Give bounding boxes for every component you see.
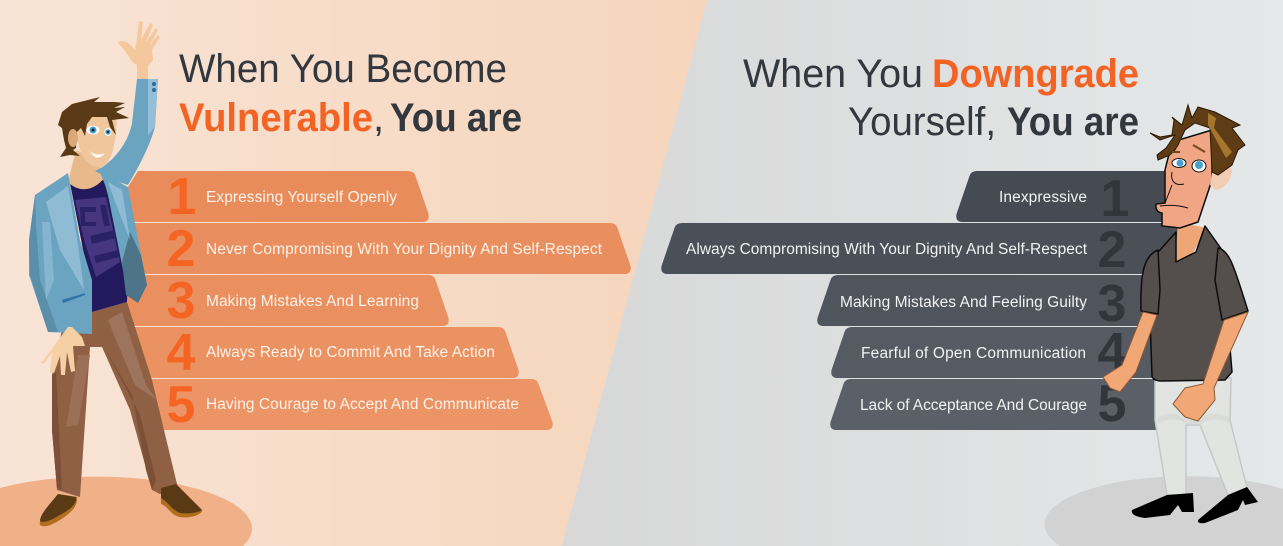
bar 1: 1 — [1101, 170, 1129, 228]
bar 4: Always Ready to Commit And Take Action — [206, 344, 495, 361]
heading: vulnerable: You are — [390, 96, 522, 140]
hand on hip — [41, 327, 85, 375]
bar 4 — [135, 324, 519, 382]
trousers — [52, 302, 178, 497]
trousers — [1155, 378, 1247, 495]
bar 5 — [150, 376, 553, 434]
panel: left background — [0, 0, 707, 546]
heading: downgrade: You are — [1007, 100, 1139, 144]
bar 5: Having Courage to Accept And Communicate — [206, 396, 519, 413]
neck — [1175, 222, 1206, 262]
arms and fists — [1103, 312, 1248, 421]
bar 2: 2 — [1098, 221, 1126, 279]
bar 1: Inexpressive — [999, 189, 1087, 206]
bar 2: 2 — [167, 220, 195, 278]
bar 1: Expressing Yourself Openly — [206, 189, 397, 206]
icon: right black shoe — [1198, 487, 1258, 523]
heading: vulnerable — [179, 47, 522, 140]
bar 3: Making Mistakes And Learning — [206, 293, 419, 310]
ground ellipse: right — [1045, 476, 1283, 546]
jacket — [29, 172, 147, 334]
figure: confident man — [29, 21, 202, 526]
heading: vulnerable: When You Become — [179, 47, 507, 91]
bar 5: 5 — [1098, 375, 1126, 433]
bar 5 — [830, 375, 1160, 433]
ground ellipse: left — [0, 477, 252, 546]
heading: vulnerable: , — [373, 96, 384, 140]
bar 2 — [128, 220, 631, 278]
heading: downgrade: Downgrade — [932, 52, 1139, 96]
bar 2 — [661, 221, 1180, 279]
bar 1: 1 — [168, 168, 196, 226]
bar 4 — [831, 323, 1160, 381]
shirt — [70, 180, 128, 312]
bar 2: Never Compromising With Your Dignity And Self-Respect — [206, 241, 603, 258]
bar 4: 4 — [1098, 323, 1127, 381]
heading: downgrade: When You — [743, 52, 923, 96]
icon: right shoe — [161, 484, 202, 517]
figure: slumped man — [1103, 105, 1258, 523]
heading: downgrade — [743, 52, 1139, 144]
shirt — [1141, 226, 1248, 381]
icon: raised hand — [118, 21, 160, 80]
icon: left shoe — [40, 494, 77, 526]
bar 3: 3 — [1098, 275, 1126, 333]
bar 1 — [956, 170, 1180, 228]
bar 4: Fearful of Open Communication — [861, 345, 1086, 362]
icon: left black shoe — [1132, 493, 1194, 518]
bar 3: 3 — [167, 272, 195, 330]
list: vulnerable traits — [125, 168, 631, 434]
bar 5: 5 — [167, 376, 195, 434]
head — [58, 97, 129, 167]
bar 3 — [125, 272, 449, 330]
bar 4: 4 — [167, 324, 196, 382]
bar 2: Always Compromising With Your Dignity And Self-Respect — [686, 241, 1088, 258]
bar 1 — [128, 168, 429, 226]
neck and chest — [68, 150, 104, 189]
heading: vulnerable: Vulnerable — [179, 96, 373, 140]
bar 3: Making Mistakes And Feeling Guilty — [840, 294, 1087, 311]
raised sleeve — [95, 79, 158, 185]
head — [1150, 105, 1245, 228]
bar 5: Lack of Acceptance And Courage — [860, 397, 1087, 414]
bar 3 — [817, 275, 1160, 333]
heading: downgrade: Yourself, — [848, 100, 996, 144]
list: downgrade traits — [661, 170, 1180, 433]
